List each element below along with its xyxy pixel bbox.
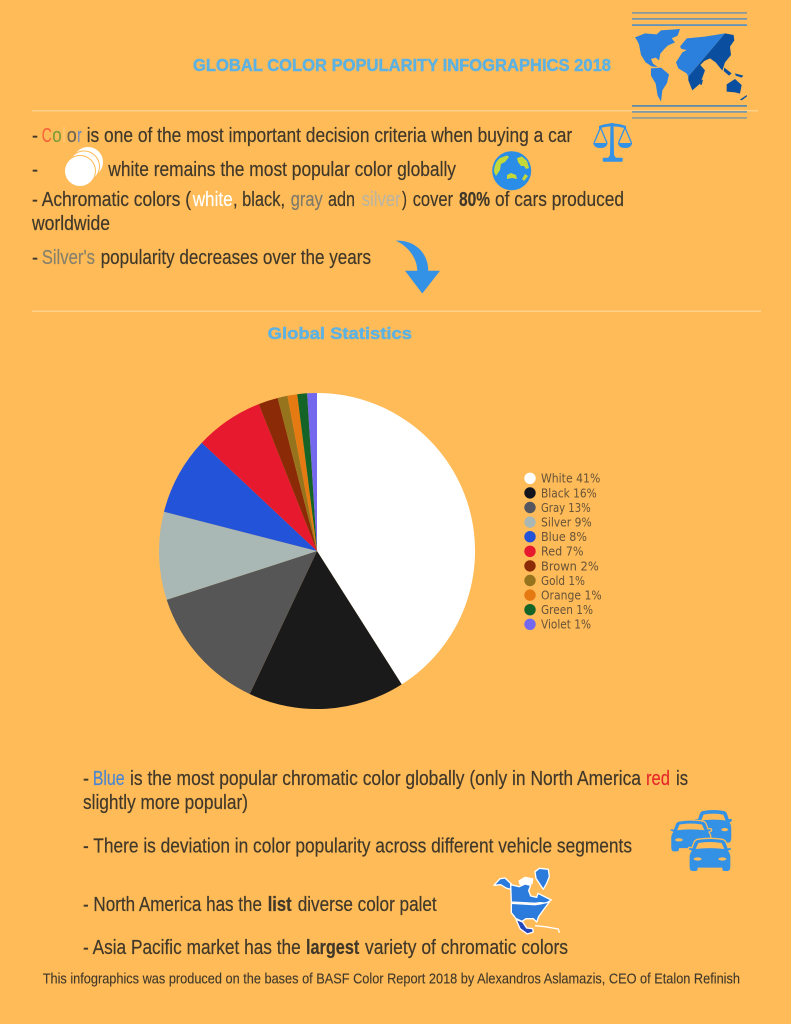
legend: Gray 13% [541, 500, 591, 515]
line: achromatic colors: worldwide [31, 213, 110, 235]
line: blue chromatic: Blue [93, 768, 125, 790]
icon: balance scale [593, 123, 632, 162]
line: north america [83, 894, 437, 916]
line: asia pacific: largest [306, 937, 360, 959]
line: silver decreasing: Silver's [42, 247, 95, 269]
line: blue chromatic: red [646, 768, 670, 790]
line: achromatic colors: ) [402, 189, 407, 211]
line: blue chromatic: slightly more popular) [83, 792, 248, 814]
line: silver decreasing: - [32, 247, 38, 269]
line: achromatic colors: 80% [459, 189, 490, 211]
arrow: popularity going down [396, 241, 440, 294]
icon: world map with bars [632, 12, 747, 119]
line: asia pacific: variety of chromatic colors [365, 937, 568, 959]
line: asia pacific [83, 937, 568, 959]
line: color criteria: l [63, 125, 65, 147]
line: blue chromatic [83, 768, 688, 814]
icon: north america map [494, 868, 559, 934]
line: silver decreasing: popularity decreases over the years [101, 247, 371, 269]
legend: Brown 2% [541, 558, 599, 573]
line: vehicle segments: - There is deviation in color popularity across different vehicle segments [83, 836, 632, 858]
legend: Silver 9% [541, 514, 592, 530]
line: achromatic colors [31, 189, 624, 235]
line: color criteria: r [77, 125, 82, 147]
line: achromatic colors: cover [413, 189, 453, 211]
line: color criteria: o [67, 125, 77, 147]
line: achromatic colors: - Achromatic colors ( [32, 189, 191, 211]
legend: Green 1% [541, 602, 593, 617]
line: achromatic colors: of cars produced [495, 189, 624, 211]
line: achromatic colors: adn [328, 189, 355, 211]
line: achromatic colors: silver [362, 189, 401, 211]
legend [524, 471, 602, 632]
line: achromatic colors: white [192, 189, 233, 211]
line: achromatic colors: gray [291, 189, 323, 211]
line: blue chromatic: is [676, 768, 688, 790]
line: white most popular [32, 146, 456, 186]
line: north america: - North America has the [83, 894, 262, 916]
line: asia pacific: - Asia Pacific market has the [83, 937, 301, 959]
line: color criteria: C [42, 125, 52, 147]
icon: white circles [64, 146, 104, 186]
legend: White 41% [541, 471, 600, 486]
pie chart [159, 393, 475, 709]
line: blue chromatic: - [83, 768, 89, 790]
line: white most popular: - [32, 159, 38, 181]
line: color criteria: is one of the most important decision criteria when buying a car [87, 125, 572, 147]
legend: Orange 1% [541, 588, 602, 602]
line: north america: list [268, 894, 292, 916]
text block: chromatic facts [83, 768, 688, 959]
title: GLOBAL COLOR POPULARITY INFOGRAPHICS 2018 [193, 55, 611, 75]
line: color criteria: - [32, 125, 38, 147]
line: white most popular: white remains the most popular color globally [107, 159, 456, 181]
legend: Blue 8% [541, 529, 587, 544]
heading: global statistics: Global Statistics [268, 324, 412, 343]
text block: key facts [31, 125, 624, 269]
line: achromatic colors: , black, [233, 189, 285, 211]
legend: Black 16% [541, 485, 597, 500]
legend: Violet 1% [541, 617, 591, 632]
line: north america: diverse color palet [298, 894, 437, 916]
line: color criteria: o [52, 125, 62, 147]
legend: Gold 1% [541, 573, 585, 588]
legend: Red 7% [541, 544, 584, 559]
line: blue chromatic: is the most popular chromatic color globally (only in North America [130, 768, 642, 790]
icon: cars [670, 810, 732, 872]
icon: globe [492, 151, 531, 190]
